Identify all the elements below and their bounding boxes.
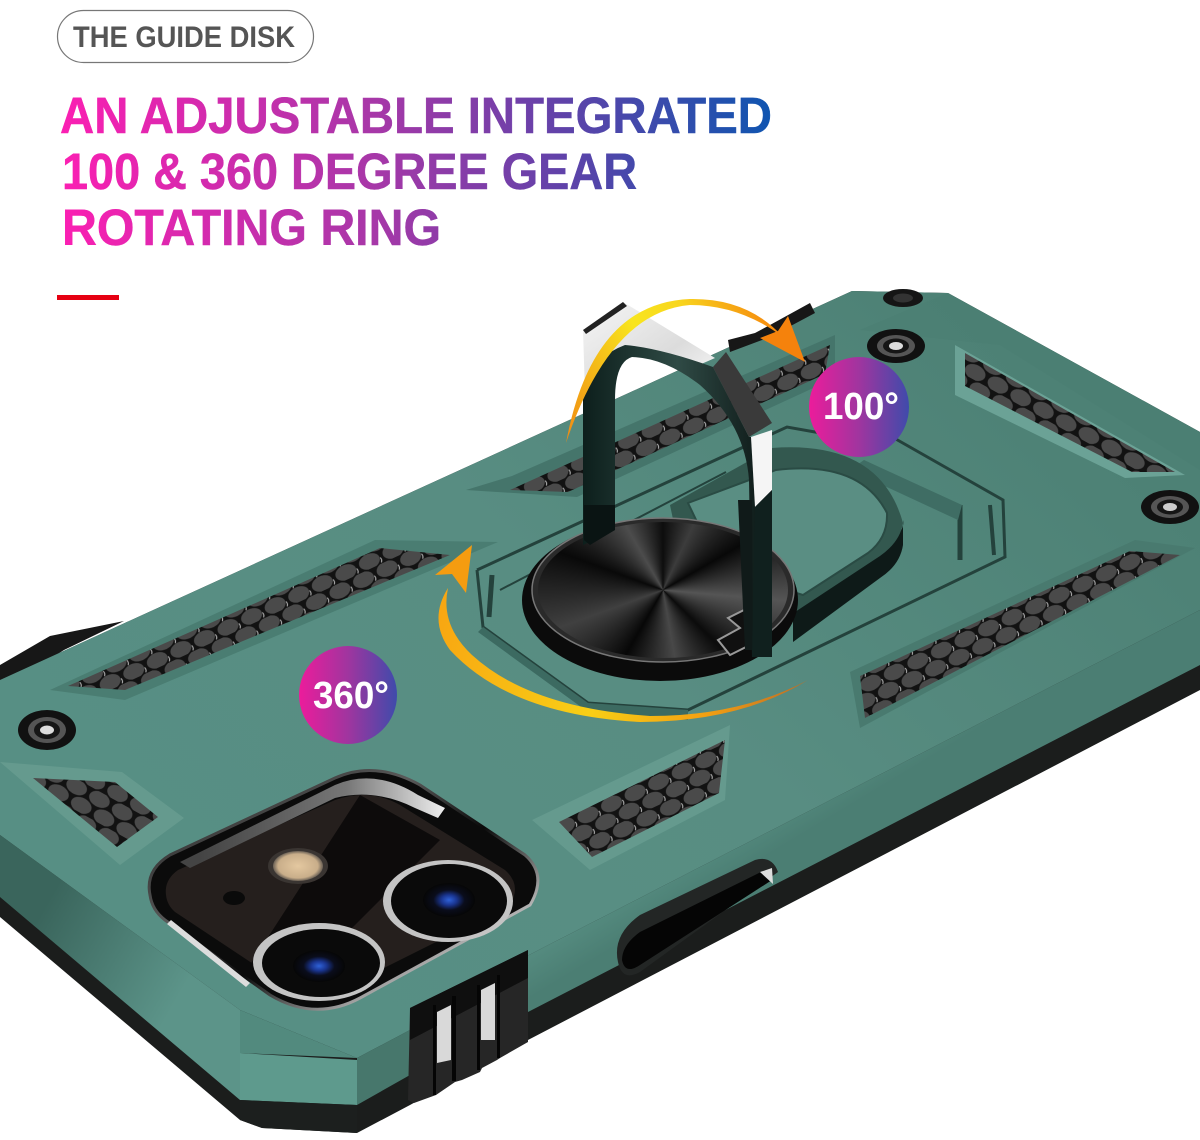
corner bevel [240,957,528,1133]
arrow: 100 degree tilt [566,299,805,443]
title: AN ADJUSTABLE INTEGRATED [60,87,772,144]
upper right bevel shade [860,293,1200,470]
top edge buttons [728,303,815,352]
right side wall [525,610,1200,1012]
title: 100 & 360 DEGREE GEAR [62,143,637,200]
corner bumper vents [408,950,528,1103]
white reflection on right leg [751,430,772,507]
dark bumper base [0,291,1200,1133]
capsule recess [670,447,903,642]
strip bevels [0,335,1195,870]
tag: the guide disk: THE GUIDE DISK [73,21,295,54]
red accent bar [57,295,119,300]
title: ROTATING RING [62,199,441,256]
right hinge block [713,352,772,437]
main teal back face [0,291,1200,1058]
arch and legs [583,345,772,657]
side volume button [617,859,778,975]
flash [268,848,328,884]
bezel highlights [180,778,445,868]
upper lens [383,860,513,942]
grip strips [0,335,1195,870]
badge: 360 degrees: 360° [313,675,389,717]
tag: the guide disk [58,10,314,62]
arrow: 360 degree rotation [435,545,808,722]
octagonal ring mount [477,427,1005,720]
lower lens [253,923,385,1001]
phone case [0,289,1200,1133]
glass reflection [250,795,440,990]
screws [18,289,1199,750]
title [60,87,772,256]
badge: 100 degrees: 100° [823,386,899,428]
silver top of ring [583,302,715,393]
microphone [223,891,245,905]
ring base disc [522,518,798,681]
side buttons on left and right edges [0,590,1200,690]
badge: 100 degrees [809,357,909,457]
camera module [149,770,538,1009]
left side wall [0,835,240,1100]
badge: 360 degrees [299,646,397,744]
folding metal ring [583,302,772,657]
